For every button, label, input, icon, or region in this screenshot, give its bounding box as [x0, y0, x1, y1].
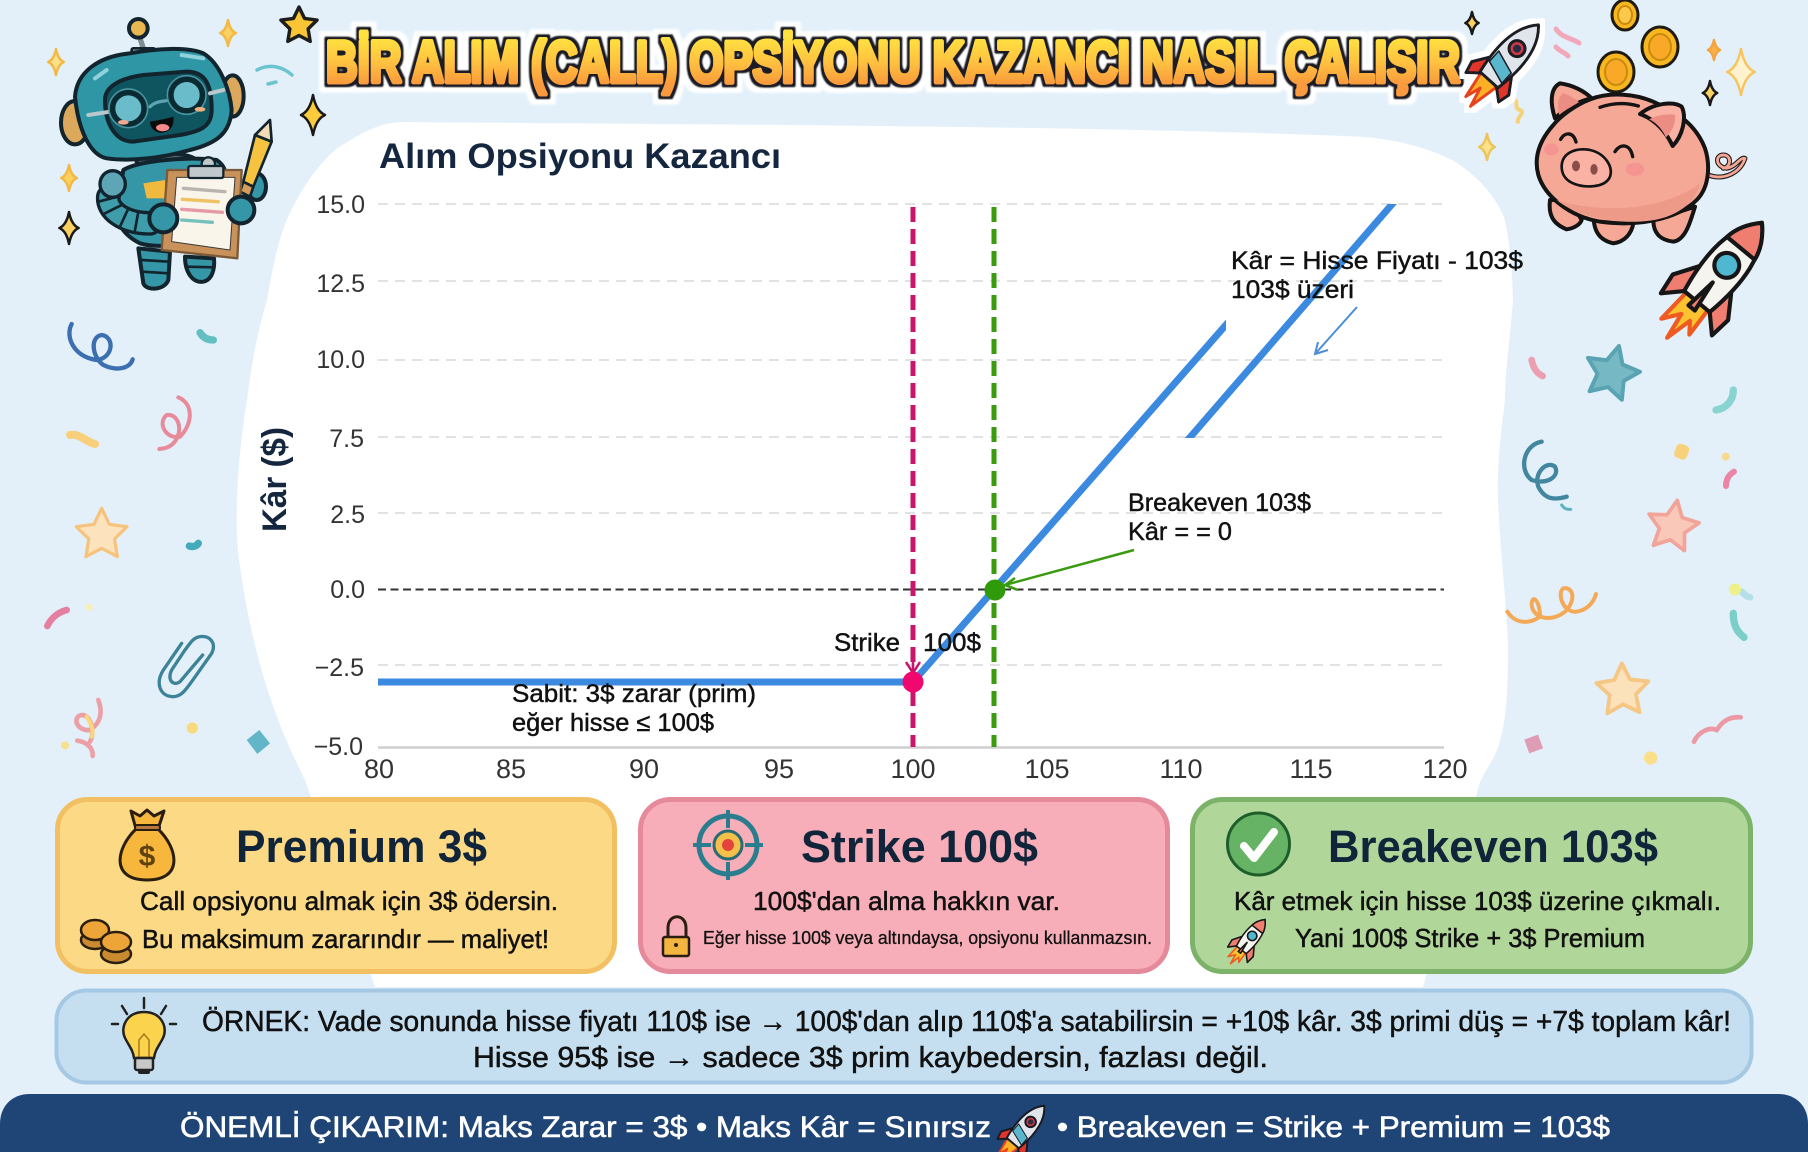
annotation: strike: 100$	[923, 629, 981, 657]
strike marker	[902, 650, 924, 692]
x axis tick labels: 100	[890, 754, 936, 784]
robot antenna	[129, 19, 155, 55]
upper payoff arrow	[1315, 307, 1357, 354]
robot head highlights	[95, 55, 203, 78]
robot left arm	[98, 171, 150, 230]
robot glasses	[88, 76, 223, 128]
panel: strike	[640, 800, 1168, 972]
pig tail	[1708, 155, 1745, 177]
x axis tick labels	[364, 754, 1468, 784]
robot head	[75, 49, 232, 160]
annotation: fixed loss: Sabit: 3$ zarar (prim)	[512, 680, 756, 708]
y axis tick labels: −2.5	[315, 654, 364, 682]
robot hands	[149, 197, 254, 232]
annotation: breakeven: Kâr = = 0	[1128, 518, 1232, 546]
chart: call option profit	[256, 137, 1523, 784]
chart title: Alım Opsiyonu Kazancı	[379, 137, 781, 176]
icon: coins above piggy bank	[1598, 0, 1678, 92]
breakeven body text: Yani 100$ Strike + 3$ Premium	[1295, 923, 1645, 953]
y axis tick labels: 10.0	[316, 346, 365, 374]
strike body text	[703, 886, 1152, 948]
zero line	[378, 588, 1444, 590]
sparkles and stars around the title	[48, 7, 1755, 244]
x axis tick labels: 110	[1159, 754, 1203, 784]
robot clipboard	[162, 157, 242, 258]
premium body text	[140, 886, 558, 954]
confetti: right side	[1507, 339, 1750, 765]
annotation: profit formula: 103$ üzeri	[1231, 276, 1354, 304]
annotation: strike: Strike	[834, 629, 900, 657]
example text	[202, 1006, 1731, 1074]
robot pencil	[240, 120, 272, 197]
example text: Hisse 95$ ise → sadece 3$ prim kaybedersin, fazlası değil.	[473, 1042, 1268, 1074]
panel: key takeaway banner	[0, 1094, 1808, 1152]
pig eyes	[1561, 134, 1633, 157]
breakeven arrow	[1005, 550, 1134, 590]
y axis tick labels: 12.5	[316, 270, 365, 298]
y axis tick labels: −5.0	[314, 733, 363, 761]
y axis label: Kâr ($)	[256, 427, 294, 532]
y axis tick labels: 7.5	[329, 425, 364, 453]
strike heading: Strike 100$	[801, 821, 1038, 872]
premium body text: Bu maksimum zararındır — maliyet!	[142, 924, 549, 954]
x axis line	[378, 746, 1444, 749]
icon: piggy bank	[1537, 83, 1745, 243]
robot right arm	[247, 173, 266, 200]
breakeven body text	[1234, 886, 1721, 953]
strike body text: 100$'dan alma hakkın var.	[753, 886, 1060, 916]
premium card background	[58, 800, 614, 972]
pig snout	[1562, 149, 1611, 186]
banner text: • Breakeven = Strike + Premium = 103$	[1057, 1111, 1610, 1144]
y axis tick labels: 0.0	[330, 576, 365, 604]
robot neck	[137, 153, 197, 170]
breakeven dashed line	[992, 207, 996, 747]
banner background	[0, 1094, 1808, 1152]
icon: light bulb	[112, 998, 176, 1072]
confetti: left side	[47, 324, 270, 756]
y axis tick labels: 2.5	[330, 501, 365, 529]
banner text	[180, 1111, 1610, 1144]
annotation: breakeven	[1128, 489, 1311, 546]
icon: banner rocket	[987, 1095, 1057, 1152]
banner text: ÖNEMLİ ÇIKARIM: Maks Zarar = 3$ • Maks Kâr = Sınırsız	[180, 1111, 991, 1144]
x axis tick labels: 115	[1289, 754, 1333, 784]
icon: money bag: $	[139, 840, 156, 873]
annotation: profit formula: Kâr = Hisse Fiyatı - 103$	[1231, 247, 1523, 275]
annotation: profit formula	[1231, 247, 1523, 304]
x axis tick labels: 85	[496, 754, 526, 784]
icon: rocket beside title	[1449, 8, 1557, 120]
x axis tick labels: 95	[764, 754, 794, 784]
pig belly shade	[1557, 183, 1700, 222]
white chart backdrop	[237, 122, 1513, 987]
x axis tick labels: 80	[364, 754, 394, 784]
gridlines	[378, 204, 1444, 665]
pig legs	[1550, 200, 1695, 243]
annotation: fixed loss	[512, 680, 756, 737]
payoff curve	[378, 172, 1420, 682]
icon: check mark	[1228, 813, 1290, 875]
icon: target	[693, 810, 763, 880]
breakeven body text: Kâr etmek için hisse 103$ üzerine çıkmalı.	[1234, 886, 1721, 916]
premium heading: Premium 3$	[236, 821, 487, 872]
icon: padlock	[663, 917, 689, 956]
annotation: breakeven: Breakeven 103$	[1128, 489, 1311, 517]
premium body text: Call opsiyonu almak için 3$ ödersin.	[140, 886, 558, 916]
breakeven marker	[984, 580, 1006, 600]
icon: small rocket	[1220, 911, 1276, 972]
breakeven card background	[1192, 800, 1750, 972]
pig coin slot	[1600, 104, 1638, 107]
pig right ear	[1640, 104, 1684, 146]
annotation: fixed loss: eğer hisse ≤ 100$	[512, 709, 714, 737]
icon: robot mascot with clipboard	[61, 19, 272, 289]
x axis tick labels: 120	[1422, 754, 1468, 784]
robot torso	[117, 159, 228, 246]
panel: premium	[58, 800, 614, 972]
x axis tick labels: 105	[1024, 754, 1070, 784]
strike body text: Eğer hisse 100$ veya altındaysa, opsiyonu kullanmazsın.	[703, 928, 1152, 948]
icon: white rocket lower right	[1639, 200, 1790, 361]
robot face screen	[105, 72, 212, 142]
strike card background	[640, 800, 1168, 972]
annotation: strike	[834, 629, 981, 657]
robot smile	[150, 117, 174, 133]
strike dashed line	[910, 207, 916, 747]
example background	[56, 990, 1752, 1082]
robot headphones	[61, 75, 244, 144]
panel: breakeven	[1192, 800, 1750, 972]
breakeven heading: Breakeven 103$	[1328, 821, 1658, 872]
icon: money bag	[120, 810, 174, 880]
pig left ear	[1552, 83, 1592, 118]
y axis tick labels: 15.0	[316, 191, 365, 219]
panel: example	[56, 990, 1752, 1082]
icon: coins	[81, 920, 131, 963]
x axis tick labels: 90	[629, 754, 659, 784]
y axis tick labels	[314, 191, 365, 761]
example text: ÖRNEK: Vade sonunda hisse fiyatı 110$ ise → 100$'dan alıp 110$'a satabilirsin = +10$ kâr. 3$ primi düş = +7$ toplam kâr!	[202, 1006, 1731, 1038]
robot chest tag	[143, 180, 165, 198]
pig body	[1537, 95, 1708, 223]
main title: BİR ALIM (CALL) OPSİYONU KAZANCI NASIL ÇALIŞIR	[326, 30, 1460, 95]
pig cheeks	[1544, 143, 1644, 176]
robot legs	[138, 248, 214, 289]
